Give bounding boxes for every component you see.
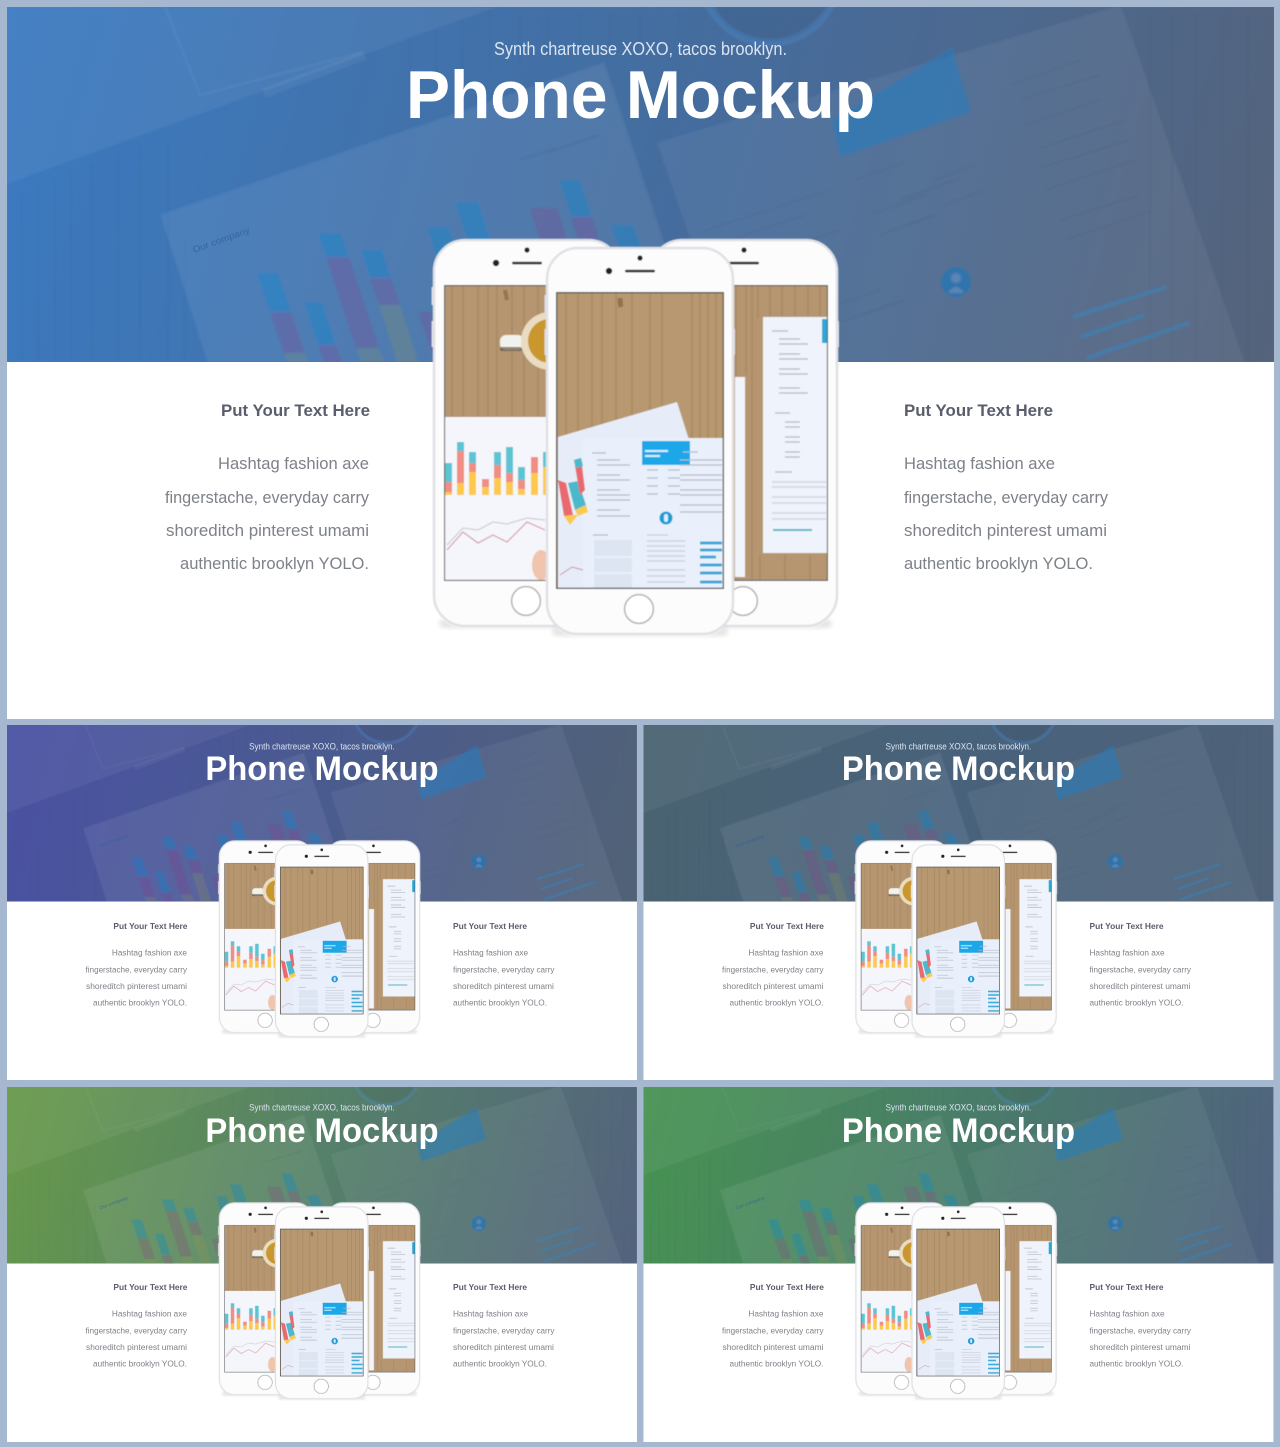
slide white base — [644, 1087, 1273, 1442]
right text block: fingerstache, everyday carry — [453, 965, 555, 975]
subtitle: Synth chartreuse XOXO, tacos brooklyn. — [249, 1102, 395, 1112]
left text block — [722, 1282, 824, 1368]
right text block: Hashtag fashion axe — [453, 1309, 528, 1319]
title: Phone Mockup — [842, 750, 1075, 788]
panel: purple slide — [7, 725, 637, 1080]
right text block — [1089, 1282, 1192, 1368]
right text block: Put Your Text Here — [1089, 921, 1164, 931]
three phone mockups — [218, 1203, 421, 1400]
left text block — [722, 921, 824, 1007]
right text block — [453, 921, 555, 1007]
right text block: authentic brooklyn YOLO. — [1089, 997, 1183, 1007]
right text block: fingerstache, everyday carry — [904, 488, 1108, 507]
right text block: shoreditch pinterest umami — [1089, 981, 1191, 991]
right text block — [453, 1282, 555, 1368]
left text block: shoreditch pinterest umami — [86, 981, 187, 991]
left text block: Put Your Text Here — [113, 1282, 188, 1292]
title: Phone Mockup — [205, 1112, 439, 1150]
right text block: fingerstache, everyday carry — [1089, 965, 1192, 975]
right text block: Hashtag fashion axe — [1089, 1309, 1165, 1319]
subtitle: Synth chartreuse XOXO, tacos brooklyn. — [249, 741, 395, 751]
panel: olive green slide — [7, 1087, 637, 1442]
header band green — [7, 1087, 637, 1264]
right text block — [1089, 921, 1192, 1007]
title: Phone Mockup — [842, 1112, 1075, 1150]
left text block: shoreditch pinterest umami — [166, 521, 369, 540]
header band slate: Our company — [735, 833, 766, 848]
left text block: fingerstache, everyday carry — [165, 488, 369, 507]
right text block: authentic brooklyn YOLO. — [453, 997, 547, 1007]
left text block: fingerstache, everyday carry — [86, 965, 188, 975]
right text block: shoreditch pinterest umami — [453, 1342, 554, 1352]
right text block: shoreditch pinterest umami — [1089, 1342, 1191, 1352]
right text block: authentic brooklyn YOLO. — [904, 554, 1093, 573]
header band purple: Our company — [99, 833, 129, 848]
right text block: Hashtag fashion axe — [904, 454, 1055, 473]
header band purple — [7, 725, 637, 902]
title: Phone Mockup — [406, 57, 875, 133]
left text block: Put Your Text Here — [750, 921, 824, 931]
subtitle: Synth chartreuse XOXO, tacos brooklyn. — [886, 741, 1031, 751]
left text block — [86, 1282, 188, 1368]
right text block: fingerstache, everyday carry — [453, 1326, 555, 1336]
right text block: Put Your Text Here — [453, 1282, 527, 1292]
right text block: Put Your Text Here — [904, 401, 1053, 420]
header band green: Our company — [99, 1195, 129, 1210]
left text block: authentic brooklyn YOLO. — [93, 997, 187, 1007]
right text block: shoreditch pinterest umami — [904, 521, 1107, 540]
left text block: authentic brooklyn YOLO. — [730, 1358, 823, 1368]
header photo band with blue gradient: Our company — [191, 225, 252, 255]
right text block: Put Your Text Here — [453, 921, 527, 931]
subtitle: Synth chartreuse XOXO, tacos brooklyn. — [494, 39, 787, 59]
panel: slate slide — [644, 725, 1274, 1080]
left text block: fingerstache, everyday carry — [86, 1326, 188, 1336]
panel: teal green slide — [644, 1087, 1274, 1442]
right text block: Hashtag fashion axe — [453, 948, 528, 958]
three phone mockups — [855, 841, 1057, 1038]
left text block: authentic brooklyn YOLO. — [180, 554, 369, 573]
left text block — [165, 401, 370, 573]
right text block: Hashtag fashion axe — [1089, 948, 1165, 958]
header photo band with blue gradient — [7, 0, 1274, 362]
left text block: Hashtag fashion axe — [112, 1309, 187, 1319]
header band teal green: Our company — [735, 1195, 766, 1210]
left text block: Hashtag fashion axe — [748, 1309, 824, 1319]
left text block: authentic brooklyn YOLO. — [730, 997, 823, 1007]
slide white base — [7, 725, 637, 1080]
three phone mockups — [855, 1203, 1057, 1400]
left text block: Put Your Text Here — [750, 1282, 824, 1292]
slide white base — [7, 1087, 637, 1442]
right text block: Put Your Text Here — [1089, 1282, 1164, 1292]
right text block: fingerstache, everyday carry — [1089, 1326, 1192, 1336]
left text block — [86, 921, 188, 1007]
right text block: authentic brooklyn YOLO. — [1089, 1358, 1183, 1368]
left text block: shoreditch pinterest umami — [723, 1342, 824, 1352]
panel: main blue slide — [7, 0, 1274, 719]
left text block: shoreditch pinterest umami — [723, 981, 824, 991]
left text block: shoreditch pinterest umami — [86, 1342, 187, 1352]
left text block: Hashtag fashion axe — [112, 948, 187, 958]
three phone mockups — [218, 841, 421, 1038]
right text block — [904, 401, 1108, 573]
title: Phone Mockup — [205, 750, 439, 788]
left text block: Hashtag fashion axe — [218, 454, 369, 473]
left text block: fingerstache, everyday carry — [722, 1326, 824, 1336]
header band teal green — [644, 1087, 1274, 1264]
left text block: Put Your Text Here — [113, 921, 188, 931]
left text block: Put Your Text Here — [221, 401, 370, 420]
subtitle: Synth chartreuse XOXO, tacos brooklyn. — [886, 1102, 1031, 1112]
three phone mockups — [432, 240, 839, 636]
header band slate — [644, 725, 1274, 902]
slide white base — [644, 725, 1273, 1080]
panel: white lower area — [7, 7, 1274, 719]
left text block: fingerstache, everyday carry — [722, 965, 824, 975]
right text block: shoreditch pinterest umami — [453, 981, 554, 991]
left text block: Hashtag fashion axe — [748, 948, 824, 958]
right text block: authentic brooklyn YOLO. — [453, 1358, 547, 1368]
left text block: authentic brooklyn YOLO. — [93, 1358, 187, 1368]
